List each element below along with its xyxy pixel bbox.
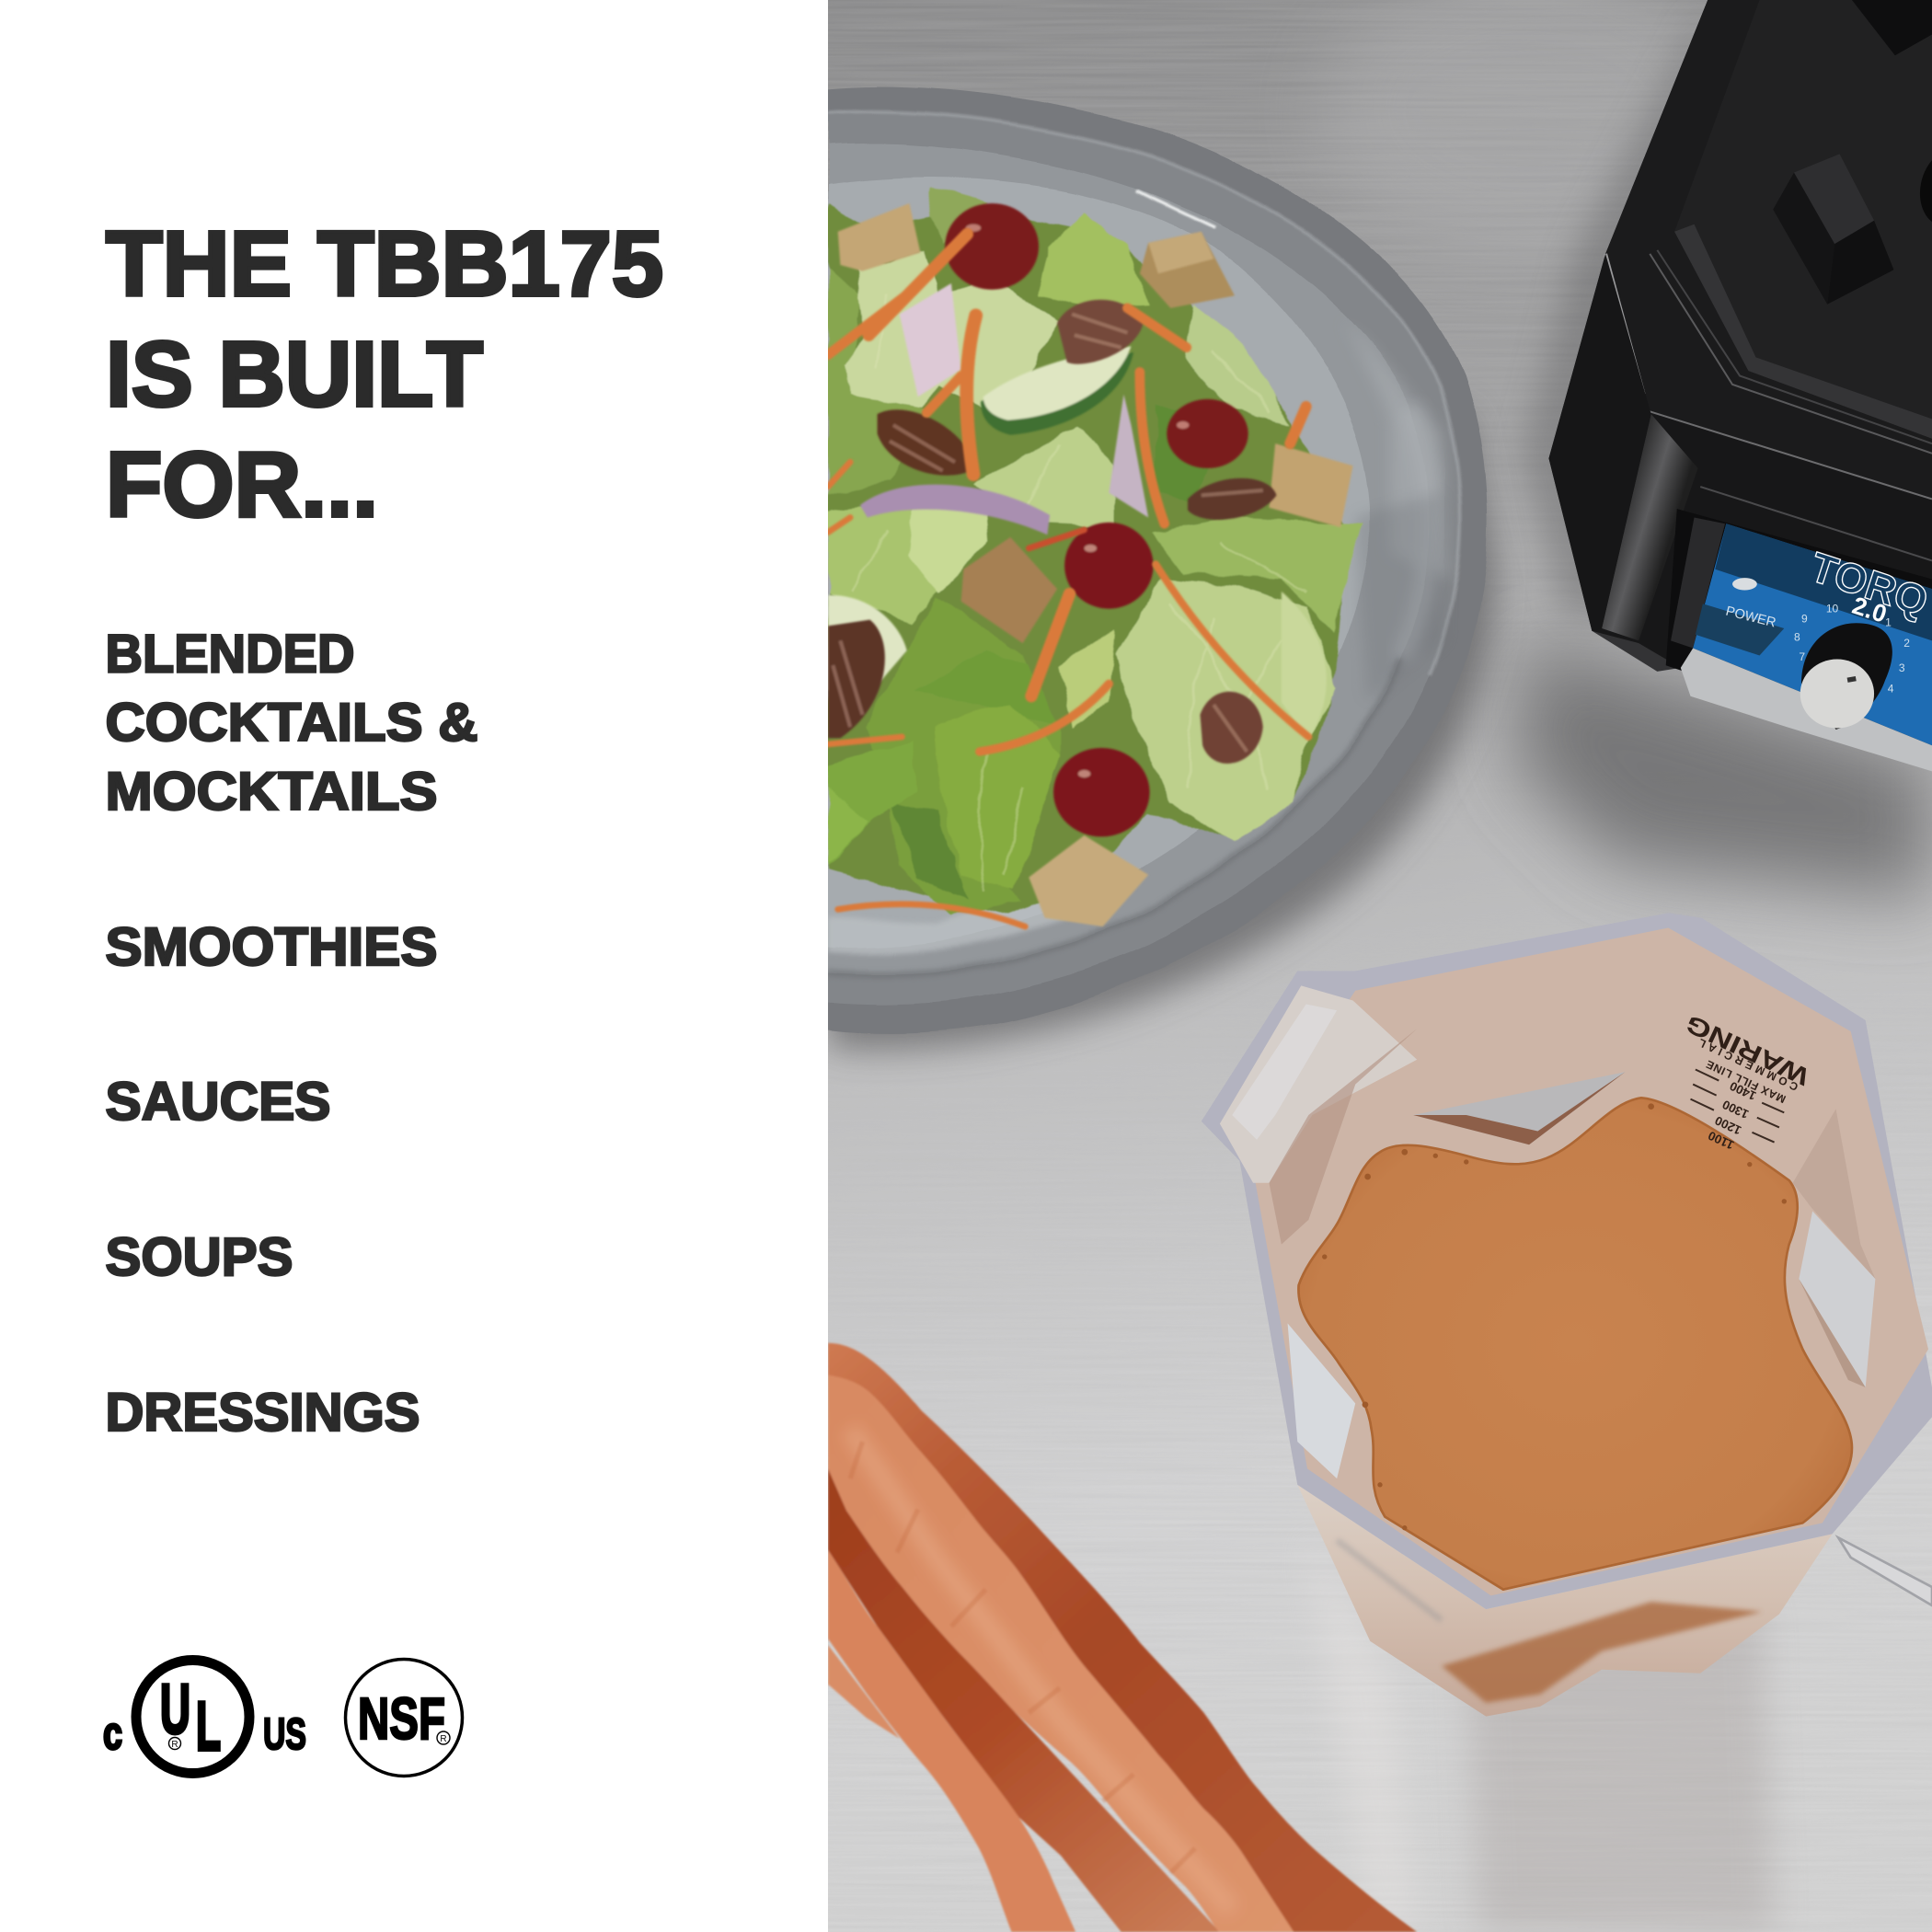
top deck — [1605, 0, 1932, 499]
power label: POWER — [1724, 604, 1777, 631]
jar measurement label — [1682, 1009, 1813, 1152]
use: blended cocktails and mocktails: MOCKTAILS — [105, 762, 438, 822]
blender base — [1548, 0, 1932, 771]
carrot shreds — [828, 234, 1308, 926]
use: soups: SOUPS — [105, 1227, 293, 1287]
carrots — [828, 1343, 1417, 1932]
speed numbers: 2 — [1903, 637, 1910, 650]
use list — [105, 624, 478, 1443]
certification logo: NSF — [346, 1660, 462, 1776]
brushed steel counter — [828, 0, 1932, 1932]
brand name: TORQ — [1805, 543, 1932, 625]
certification logo: cULus: c — [103, 1708, 122, 1759]
use: smoothies: SMOOTHIES — [105, 917, 438, 977]
shadowed carrot underneath — [828, 1466, 1220, 1932]
main carrot — [828, 1375, 1294, 1932]
white text panel — [0, 0, 828, 1932]
jar handle — [1838, 1537, 1932, 1605]
certification logo: cULus: R — [171, 1740, 178, 1750]
salad — [828, 185, 1362, 926]
tomatoes — [945, 203, 1248, 836]
title: IS BUILT — [106, 323, 483, 426]
drive coupling tab — [1773, 154, 1893, 305]
speed knob — [1800, 623, 1892, 730]
jar measurement label: 1200 — [1713, 1113, 1743, 1137]
certification logo: cULus: US — [263, 1710, 306, 1759]
title: THE TBB175 — [106, 213, 663, 316]
speed numbers: 10 — [1826, 603, 1839, 615]
pecans — [828, 300, 1277, 764]
product photo panel — [828, 0, 1932, 1932]
cucumber slices — [828, 346, 1327, 740]
plate shadow — [828, 407, 1494, 1049]
speed numbers: 3 — [1899, 661, 1905, 674]
red onion — [860, 283, 1148, 535]
speed numbers: 7 — [1799, 650, 1805, 663]
certification logo: NSF: R — [440, 1734, 447, 1744]
certification logo: cULus — [103, 1660, 306, 1774]
jar rim — [1202, 913, 1932, 1609]
back dark carrot — [828, 1343, 1417, 1932]
lower left carrot — [828, 1550, 1075, 1932]
use: blended cocktails and mocktails: BLENDED — [105, 624, 355, 684]
jar interior — [1249, 927, 1928, 1595]
jar lower body — [1297, 1485, 1833, 1717]
plate — [828, 86, 1487, 1034]
jar measurement label: 1100 — [1706, 1129, 1736, 1152]
speed numbers: 4 — [1888, 683, 1894, 696]
jar measurement label: COMMERCIAL — [1696, 1036, 1800, 1094]
control panel — [1666, 509, 1932, 754]
control panel: 2.0 — [1849, 592, 1890, 628]
side face with highlight — [1602, 414, 1698, 640]
jar measurement label: 1400 — [1728, 1079, 1758, 1103]
speed numbers: 9 — [1801, 612, 1808, 625]
certification logo: cULus: U — [160, 1671, 190, 1749]
use: dressings: DRESSINGS — [105, 1383, 420, 1443]
jar measurement label: 1300 — [1720, 1098, 1751, 1121]
speed numbers — [1794, 603, 1910, 696]
croutons — [838, 203, 1353, 926]
use: blended cocktails and mocktails: COCKTAILS & — [105, 693, 478, 753]
far left carrot — [828, 1645, 900, 1739]
title: FOR... — [106, 433, 378, 536]
speed numbers: 1 — [1885, 615, 1892, 628]
use: sauces: SAUCES — [105, 1072, 331, 1132]
use: blended cocktails and mocktails — [105, 624, 478, 822]
reflective facets — [1413, 1072, 1626, 1144]
foam bubbles — [1322, 1103, 1787, 1530]
silver trim strip — [1681, 648, 1932, 771]
jar measurement label: MAX FILL LINE — [1704, 1058, 1788, 1106]
blended liquid — [1298, 1098, 1852, 1590]
blender jar — [1202, 913, 1932, 1717]
title — [106, 213, 663, 536]
certification logo: cULus: L — [196, 1687, 221, 1765]
certification logo: NSF: NSF — [358, 1685, 445, 1752]
lettuce leaves — [828, 185, 1362, 914]
jar measurement label: WARING — [1682, 1009, 1813, 1091]
speed numbers: 8 — [1794, 630, 1800, 643]
